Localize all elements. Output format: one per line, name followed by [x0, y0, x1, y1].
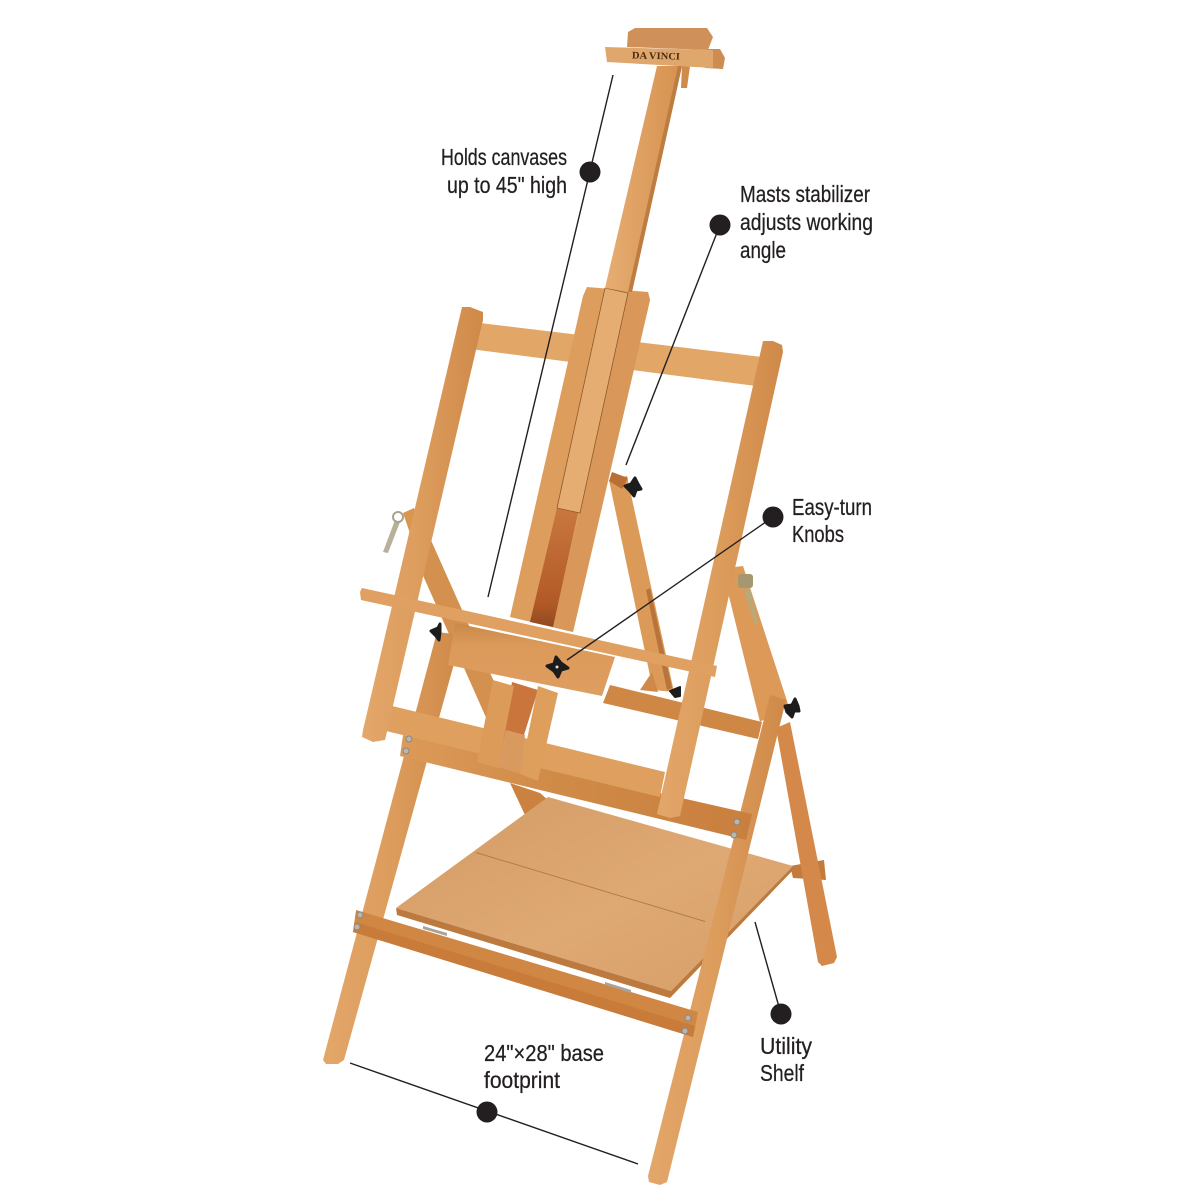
rear right strut	[723, 566, 788, 722]
rear right leg	[776, 722, 837, 966]
callout: utility shelf: Utility	[760, 1033, 812, 1059]
knob: mast stabilizer	[625, 478, 641, 496]
knob: left frame	[431, 624, 440, 640]
wing screw right	[738, 574, 758, 625]
left folding brace	[417, 538, 500, 722]
callout: base footprint: 24"×28" base	[484, 1040, 604, 1066]
canvas frame right rail	[657, 341, 783, 818]
callout: utility shelf: Shelf	[760, 1060, 805, 1086]
callout: easy-turn knobs: Easy-turn	[792, 494, 872, 520]
rear stub bar	[790, 860, 826, 880]
lower mast groove light section	[497, 730, 525, 774]
top holder block	[627, 28, 713, 50]
callout: base footprint	[350, 1040, 638, 1164]
mast groove	[530, 508, 578, 627]
mast sleeve	[510, 287, 650, 632]
wing screw left	[383, 512, 403, 553]
canvas frame top crossbar	[470, 323, 762, 386]
top holder plate side	[705, 49, 725, 69]
canvas frame left rail	[362, 307, 483, 742]
shelf back rail	[400, 735, 752, 840]
upper cross rail	[603, 685, 762, 739]
shelf surface	[396, 797, 793, 991]
callout: holds canvases: up to 45" high	[447, 172, 567, 198]
lower frame rail	[382, 705, 665, 797]
top holder plate	[605, 47, 713, 68]
callout: easy-turn knobs: Knobs	[792, 521, 844, 547]
callout: masts stabilizer: adjusts working	[740, 209, 873, 235]
callout: base footprint: footprint	[484, 1067, 561, 1093]
rear centre strut	[510, 783, 548, 815]
shelf front edge	[396, 866, 795, 998]
callout: holds canvases: Holds canvases	[441, 144, 567, 170]
mast brace	[609, 476, 674, 692]
tray block	[448, 623, 615, 696]
upper mast	[605, 66, 682, 292]
front left leg	[323, 632, 462, 1064]
front right leg	[648, 695, 786, 1185]
left brace pivot block	[403, 508, 424, 545]
mast inner slide	[557, 288, 628, 513]
bolts	[354, 736, 740, 1034]
callout: easy-turn knobs	[567, 494, 872, 660]
knob: centre right	[670, 687, 680, 697]
shelf seam	[476, 852, 705, 922]
callout: holds canvases	[441, 75, 613, 597]
upper mast side strip	[681, 66, 690, 88]
tray	[360, 588, 717, 677]
lower mast right rail	[520, 686, 558, 781]
knob: right frame	[785, 699, 799, 717]
front cross rail	[353, 910, 698, 1037]
mast brace cap	[609, 472, 628, 489]
hinges	[423, 926, 631, 993]
lower mast left rail	[477, 680, 514, 768]
easel illustration	[323, 28, 837, 1185]
callout: utility shelf	[755, 922, 812, 1086]
lower mast groove	[497, 682, 538, 773]
callout: masts stabilizer	[626, 181, 873, 465]
knob: tray	[547, 657, 568, 677]
callout: masts stabilizer: Masts stabilizer	[740, 181, 870, 207]
brand on plate: DA VINCI	[632, 50, 680, 63]
callout: masts stabilizer: angle	[740, 237, 786, 263]
